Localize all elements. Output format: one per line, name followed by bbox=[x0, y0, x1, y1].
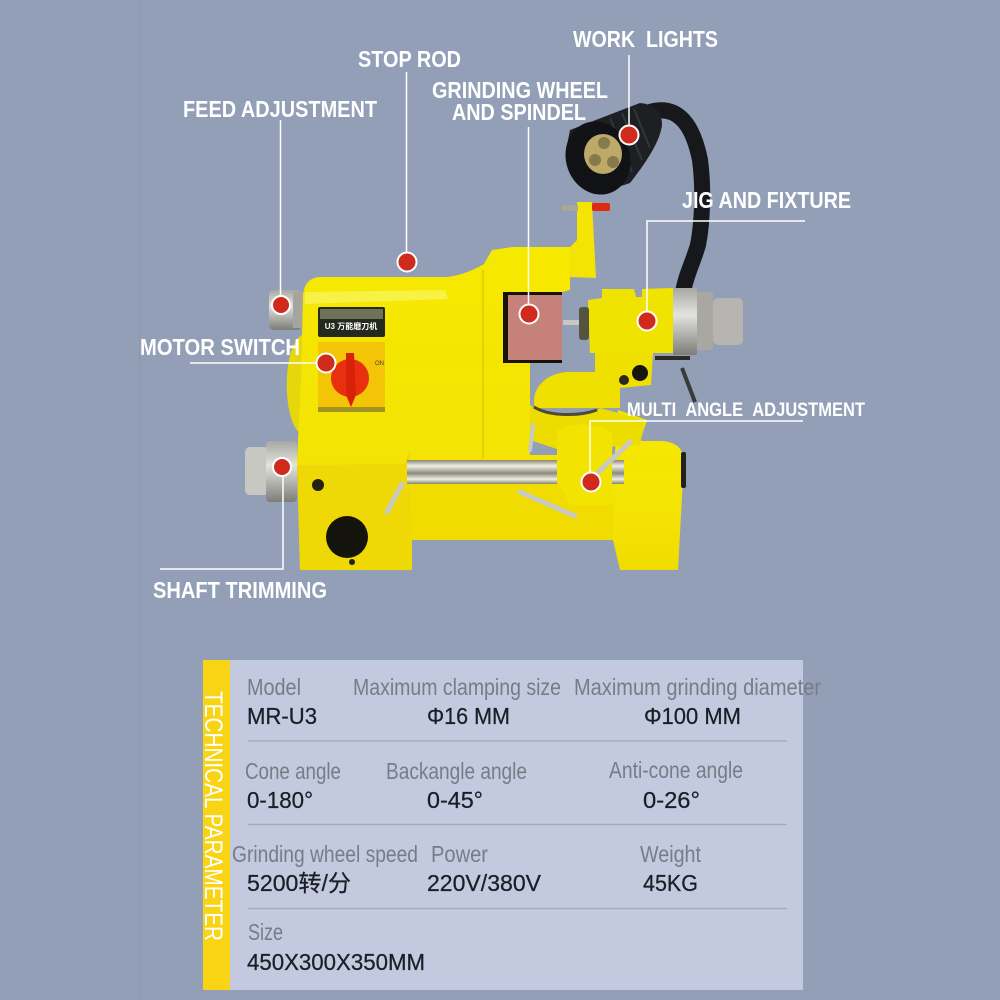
row 3: Power bbox=[431, 841, 488, 867]
fixture head bbox=[563, 288, 743, 355]
levers bbox=[387, 425, 630, 516]
label plate: U3 万能磨刀机 bbox=[325, 321, 377, 331]
callout: grinding wheel and spindel bbox=[432, 77, 608, 324]
work light head bbox=[556, 103, 662, 203]
work light hose bbox=[650, 110, 702, 292]
row 1: Maximum clamping size bbox=[353, 674, 561, 700]
callout: shaft trimming bbox=[153, 458, 327, 603]
row 4: 450X300X350MM bbox=[247, 949, 425, 975]
row 3 bbox=[232, 841, 702, 896]
row 1: Φ100 MM bbox=[644, 703, 741, 729]
grinding wheel bbox=[503, 292, 562, 363]
row 4 bbox=[247, 919, 425, 975]
motor switch: ON bbox=[375, 361, 384, 367]
feed knob bbox=[269, 290, 304, 330]
callout: motor switch bbox=[140, 334, 336, 372]
callout: grinding wheel and spindel: AND SPINDEL bbox=[452, 99, 586, 125]
row 3: 5200转/分 bbox=[247, 870, 351, 896]
machine: universal cutter grinder bbox=[245, 103, 743, 570]
right foot bbox=[613, 410, 684, 570]
callout: motor switch: MOTOR SWITCH bbox=[140, 334, 300, 360]
row 1: MR-U3 bbox=[247, 703, 317, 729]
panel: technical parameter bbox=[199, 660, 821, 990]
row 2: Cone angle bbox=[245, 758, 341, 784]
callout: jig and fixture: JIG AND FIXTURE bbox=[682, 187, 851, 213]
row 1: Maximum grinding diameter bbox=[574, 674, 821, 700]
callout: work lights bbox=[573, 26, 718, 144]
slide rod bbox=[407, 460, 557, 484]
callout: feed adjustment: FEED ADJUSTMENT bbox=[183, 96, 378, 122]
body highlights bbox=[305, 290, 448, 304]
row 3: Weight bbox=[640, 841, 702, 867]
callout: grinding wheel and spindel: GRINDING WHEEL bbox=[432, 77, 608, 103]
main body bbox=[297, 247, 570, 570]
base beneath rod bbox=[412, 480, 624, 540]
end cap bbox=[681, 452, 686, 488]
row 2: 0-26° bbox=[643, 787, 700, 813]
row 2: 0-180° bbox=[247, 787, 313, 813]
row 3: 45KG bbox=[643, 870, 698, 896]
label plate bbox=[318, 307, 385, 337]
callout: stop rod: STOP ROD bbox=[358, 46, 461, 72]
callout: feed adjustment bbox=[183, 96, 378, 314]
row 2: 0-45° bbox=[427, 787, 483, 813]
row 1: Φ16 MM bbox=[427, 703, 510, 729]
callout: work lights: WORK LIGHTS bbox=[573, 26, 718, 52]
callout: multi angle adjustment: MULTI ANGLE ADJUSTMENT bbox=[627, 400, 865, 421]
row 2 bbox=[245, 757, 743, 813]
row 2: Anti-cone angle bbox=[609, 757, 743, 783]
side tab: TECHNICAL PARAMETER bbox=[199, 691, 227, 941]
row 4: Size bbox=[248, 919, 283, 945]
shaft trimming knob bbox=[245, 441, 297, 502]
callout: shaft trimming: SHAFT TRIMMING bbox=[153, 577, 327, 603]
motor switch bbox=[318, 342, 385, 412]
row 2: Backangle angle bbox=[386, 758, 527, 784]
holes bbox=[312, 479, 368, 565]
rear motor bulge bbox=[287, 335, 302, 433]
callout: jig and fixture bbox=[638, 187, 851, 330]
row 1: Model bbox=[247, 674, 301, 700]
row 1 bbox=[247, 674, 821, 729]
callout: multi angle adjustment bbox=[582, 400, 865, 492]
row 3: Grinding wheel speed bbox=[232, 841, 418, 867]
callout: stop rod bbox=[358, 46, 461, 272]
row 3: 220V/380V bbox=[427, 870, 542, 896]
crank handle bbox=[562, 202, 610, 278]
swivel mount bbox=[530, 353, 695, 505]
